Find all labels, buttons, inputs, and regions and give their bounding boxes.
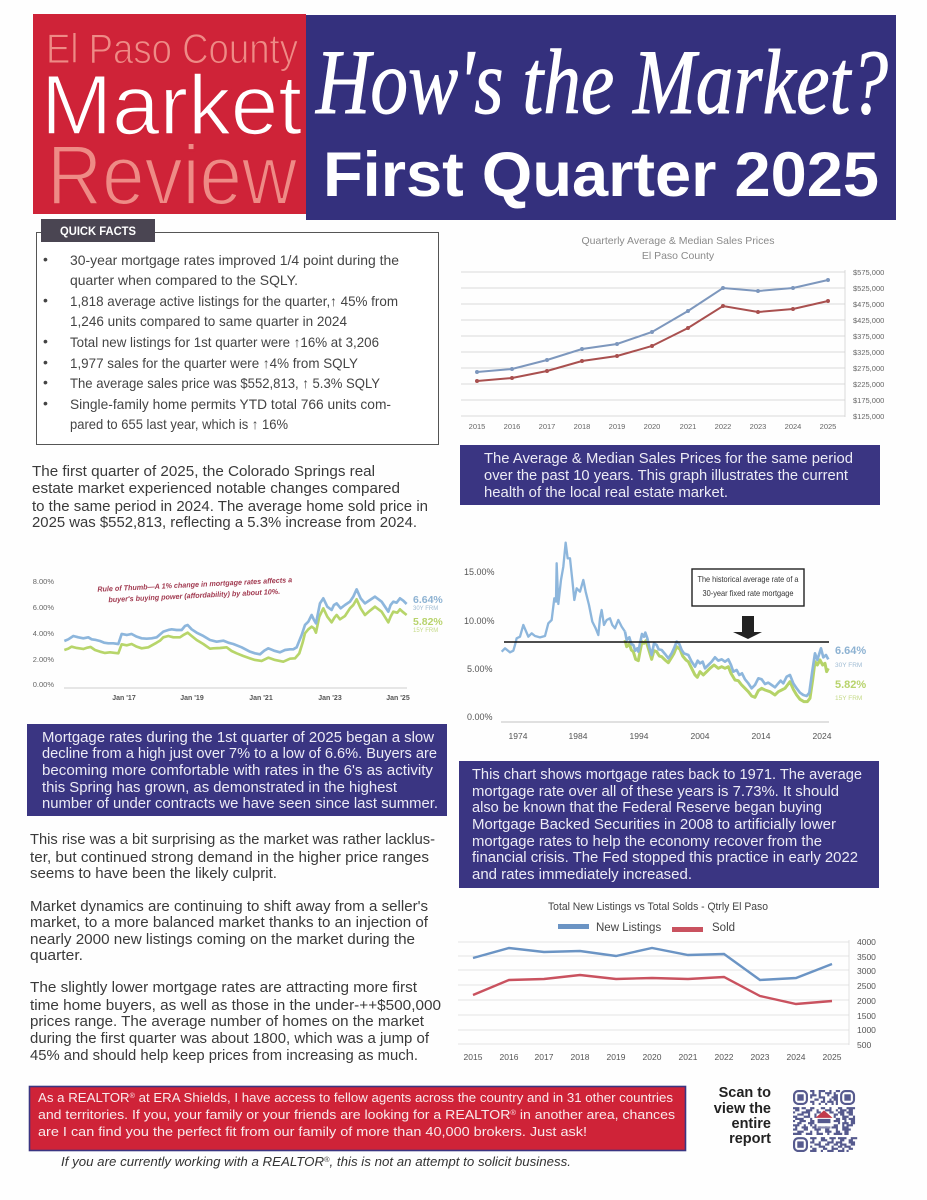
callout: historical mortgage rates: This chart shows mortgage rates back to 1971. The average [472, 767, 862, 783]
scan prompt: entire [732, 1116, 771, 1132]
chart: historical mortgage rates: 0.00% [467, 712, 493, 722]
series: 15-year rate [64, 599, 407, 662]
chart title [582, 235, 774, 262]
callout: historical average: 30-year fixed rate mortgage [702, 589, 794, 598]
scan prompt: report [729, 1131, 771, 1147]
callout: historical mortgage rates [459, 761, 879, 888]
chart: recent mortgage rates: 6.00% [33, 603, 54, 612]
series labels: 30Y FRM [835, 662, 862, 669]
chart: recent mortgage rates: 4.00% [33, 629, 54, 638]
chart title: Total New Listings vs Total Solds - Qtrly El Paso [548, 901, 768, 913]
text block: market commentary: ter, but continued strong demand in the higher price ranges [30, 850, 429, 866]
chart: historical mortgage rates [464, 543, 866, 741]
x axis labels: Jan '23 [318, 695, 342, 702]
x axis labels: 1994 [630, 731, 649, 741]
legend [558, 922, 735, 934]
callout: historical mortgage rates: Mortgage Backed Securities in 2008 to artificially lower [472, 817, 836, 833]
callout: recent mortgage rates: decline from a high just over 7% to a low of 6.6%. Buyers are [42, 746, 437, 762]
text block: intro: to the same period in 2024. The average home sold price in [32, 499, 428, 515]
x axis labels [464, 1052, 842, 1062]
quick facts bullets: • [43, 374, 48, 390]
y axis labels: 2000 [857, 996, 876, 1006]
x axis labels: 2019 [609, 422, 625, 431]
callout: recent mortgage rates: this Spring has grown, as demonstrated in the highest [42, 780, 397, 796]
x axis labels: 2017 [539, 422, 555, 431]
scan prompt: view the [714, 1101, 771, 1117]
quick facts bullets: Single-family home permits YTD total 766 units com- [70, 396, 391, 412]
x axis labels: 2022 [715, 422, 731, 431]
x axis labels: 2021 [680, 422, 696, 431]
callout: sales price explanation: health of the local real estate market. [484, 485, 728, 501]
y axis labels: $125,000 [853, 412, 884, 421]
text block: intro: The first quarter of 2025, the Colorado Springs real [32, 464, 375, 480]
chart: new listings vs solds [458, 901, 876, 1062]
callout: recent mortgage rates: number of under contracts we have seen since last summer. [42, 796, 438, 812]
text block: intro: estate market experienced notable changes compared [32, 481, 400, 497]
callout: recent mortgage rates: becoming more comfortable with rates in the 6's as activity [42, 763, 434, 779]
quick facts bullets: • [43, 251, 48, 267]
y axis labels: 1500 [857, 1011, 876, 1021]
x axis labels [112, 695, 410, 702]
y axis labels: $575,000 [853, 268, 884, 277]
series labels: 15Y FRM [835, 695, 862, 702]
callout: historical average: The historical average rate of a [698, 575, 799, 584]
series: average price [477, 280, 828, 372]
quick facts bullets: • [43, 354, 48, 370]
text block: market commentary: This rise was a bit surprising as the market was rather lacklus- [30, 832, 435, 848]
x axis labels: 2004 [691, 731, 710, 741]
text block: market commentary: time home buyers, as well as those in the under-++$500,000 [30, 998, 441, 1014]
y axis labels: 2500 [857, 981, 876, 991]
quick facts tab [41, 219, 155, 242]
series labels: 5.82% [835, 679, 866, 691]
chart title: Quarterly Average & Median Sales Prices [582, 235, 774, 247]
callout: realtor referral: and territories. If you, your family or your friends are looking for a REALTOR [38, 1107, 474, 1122]
quick facts bullets: Total new listings for 1st quarter were ↑16% at 3,206 [70, 334, 379, 350]
series: sold [473, 975, 832, 1004]
chart: quarterly average and median sales prices [461, 235, 884, 431]
x axis labels: Jan '21 [249, 695, 273, 702]
quick facts bullets: pared to 655 last year, which is ↑ 16% [70, 416, 288, 432]
series labels: 30Y FRM [413, 606, 438, 612]
masthead: El Paso County: El Paso County [46, 25, 298, 72]
x axis labels: 2015 [464, 1052, 483, 1062]
text block: market commentary: nearly 2000 new listings coming on the market during the [30, 932, 415, 948]
x axis labels: 2024 [785, 422, 801, 431]
callout: historical mortgage rates: financial crisis. The Fed stopped this practice in early 2022 [472, 850, 858, 866]
chart: recent mortgage rates: 0.00% [33, 680, 54, 689]
text block: market commentary [30, 832, 441, 1064]
header banner [33, 14, 896, 222]
quick facts tab: QUICK FACTS [60, 226, 136, 238]
annotation: rule of thumb [97, 575, 293, 605]
quick facts bullets: 1,246 units compared to same quarter in 2024 [70, 313, 347, 329]
text block: market commentary: during the first quarter was about 1800, which was a jump of [30, 1031, 430, 1047]
x axis labels: Jan '17 [112, 695, 136, 702]
text block: market commentary: Market dynamics are continuing to shift away from a seller's [30, 899, 428, 915]
y axis labels: $275,000 [853, 364, 884, 373]
icon: house logo [815, 1110, 833, 1129]
y axis labels: $175,000 [853, 396, 884, 405]
icon: QR code [793, 1091, 857, 1151]
callout: recent mortgage rates: Mortgage rates during the 1st quarter of 2025 began a slow [42, 730, 435, 746]
y axis labels: $225,000 [853, 380, 884, 389]
text block: intro: 2025 was $552,813, reflecting a 5.3% increase from 2024. [32, 515, 417, 531]
y axis labels: $425,000 [853, 316, 884, 325]
x axis labels: 2023 [751, 1052, 770, 1062]
series labels: 5.82% [413, 616, 443, 628]
chart: recent mortgage rates: 8.00% [33, 577, 54, 586]
y axis labels: 3500 [857, 952, 876, 962]
callout: realtor referral: As a REALTOR [38, 1090, 128, 1105]
scan prompt [714, 1085, 771, 1147]
quick facts bullets: • [43, 395, 48, 411]
x axis labels: Jan '19 [180, 695, 204, 702]
y axis labels: $525,000 [853, 284, 884, 293]
callout: historical mortgage rates: mortgage rates to help the economy recover from the [472, 834, 822, 850]
chart title: El Paso County [642, 250, 715, 262]
callout: recent mortgage rates [27, 724, 447, 816]
quick facts bullets: • [43, 333, 48, 349]
text block: market commentary: The slightly lower mortgage rates are attracting more first [30, 980, 417, 996]
callout: sales price explanation: The Average & Median Sales Prices for the same period [484, 451, 853, 467]
callout: realtor referral: in another area, chances [516, 1107, 676, 1122]
callout: historical mortgage rates: and rates immediately increased. [472, 867, 692, 883]
legend: New Listings [596, 922, 661, 934]
chart: historical mortgage rates: 5.00% [467, 664, 493, 674]
callout: realtor referral [30, 1086, 686, 1150]
y axis labels [853, 268, 884, 421]
y axis labels: 3000 [857, 966, 876, 976]
x axis labels [469, 422, 836, 431]
y axis labels: 4000 [857, 937, 876, 947]
text block: market commentary: seems to have been the likely culprit. [30, 866, 277, 882]
quick facts bullets: 30-year mortgage rates improved 1/4 point during the [70, 252, 399, 268]
x axis labels: 2025 [820, 422, 836, 431]
disclaimer: If you are currently working with a REALTOR [61, 1155, 309, 1169]
historical average line [504, 641, 829, 643]
disclaimer: , this is not an attempt to solicit business. [330, 1155, 571, 1169]
x axis labels: 2015 [469, 422, 485, 431]
chart: historical mortgage rates: 10.00% [464, 616, 495, 626]
y axis labels: 500 [857, 1040, 871, 1050]
series: 15-year rate [625, 640, 828, 702]
x axis labels: 2025 [823, 1052, 842, 1062]
chart: historical mortgage rates: 15.00% [464, 567, 495, 577]
y axis labels: $375,000 [853, 332, 884, 341]
quick facts bullets: 1,977 sales for the quarter were ↑4% from SQLY [70, 355, 359, 371]
x axis labels: 2016 [500, 1052, 519, 1062]
x axis labels: 2024 [813, 731, 832, 741]
x axis labels [509, 731, 832, 741]
y axis labels: $325,000 [853, 348, 884, 357]
quick facts bullets: quarter when compared to the SQLY. [70, 272, 298, 288]
series labels: 6.64% [835, 645, 866, 657]
x axis labels: 2021 [679, 1052, 698, 1062]
x axis labels: 2017 [535, 1052, 554, 1062]
series labels [835, 645, 866, 702]
quick facts border [36, 232, 438, 444]
title: First Quarter 2025: First Quarter 2025 [323, 140, 879, 210]
masthead: Market: Market [41, 58, 302, 152]
callout: sales price explanation: over the past 10 years. This graph illustrates the current [484, 468, 848, 484]
series: 30-year rate [502, 543, 828, 696]
x axis labels: 2016 [504, 422, 520, 431]
panel: red masthead background [33, 14, 306, 214]
masthead: Review: Review [47, 128, 297, 222]
x axis labels: 2018 [574, 422, 590, 431]
text block: market commentary: 45% and should help keep prices from increasing as much. [30, 1048, 418, 1064]
x axis labels: 2020 [644, 422, 660, 431]
scan prompt: Scan to [719, 1085, 771, 1101]
arrow: down to average line [733, 616, 762, 639]
quick facts bullets: The average sales price was $552,813, ↑ 5.3% SQLY [70, 375, 381, 391]
x axis labels: Jan '25 [386, 695, 410, 702]
text block: intro [32, 464, 428, 531]
callout: realtor referral: at ERA Shields, I have access to fellow agents across the country and in 31 other countries [135, 1090, 674, 1105]
text block: market commentary: prices range. The average number of homes on the market [30, 1014, 424, 1030]
chart: recent mortgage rates: 2.00% [33, 655, 54, 664]
disclaimer: ® [324, 1156, 330, 1164]
series: new listings [473, 948, 832, 980]
text block: market commentary: quarter. [30, 948, 83, 964]
x axis labels: 2019 [607, 1052, 626, 1062]
callout: historical mortgage rates: mortgage rate over all of these years is 7.73%. It should [472, 784, 839, 800]
callout: historical mortgage rates: also be known that the Federal Reserve began buying [472, 800, 822, 816]
callout: sales price explanation [460, 445, 880, 505]
x axis labels: 2022 [715, 1052, 734, 1062]
x axis labels: 1974 [509, 731, 528, 741]
y axis labels: 1000 [857, 1025, 876, 1035]
x axis labels: 2014 [752, 731, 771, 741]
panel: quick facts [36, 219, 438, 444]
callout: realtor referral: are I can find you the perfect fit from our family of more than 40,000 brokers. Just ask! [38, 1124, 587, 1139]
panel: blue title background [306, 15, 896, 220]
x axis labels: 1984 [569, 731, 588, 741]
text block: market commentary: market, to a more balanced market thanks to an injection of [30, 915, 429, 931]
x axis labels: 2024 [787, 1052, 806, 1062]
y axis labels: $475,000 [853, 300, 884, 309]
chart: recent mortgage rates [33, 575, 443, 702]
series: 30-year rate [64, 589, 407, 654]
x axis labels: 2023 [750, 422, 766, 431]
x axis labels: 2018 [571, 1052, 590, 1062]
annotation: rule of thumb: Rule of Thumb—A 1% change in mortgage rates affects a [97, 575, 292, 594]
quick facts bullets: • [43, 292, 48, 308]
quick facts bullets [43, 251, 399, 432]
series labels: 6.64% [413, 594, 443, 606]
callout: historical average [692, 569, 804, 606]
callout: realtor referral: ® [510, 1109, 517, 1117]
annotation: rule of thumb: buyer's buying power (affordability) by about 10%. [108, 587, 280, 604]
y axis labels [857, 937, 876, 1050]
series: median price [477, 301, 828, 381]
series labels [413, 594, 443, 634]
quick facts bullets: 1,818 average active listings for the quarter,↑ 45% from [70, 293, 398, 309]
series labels: 15Y FRM [413, 628, 438, 634]
legend: Sold [712, 922, 735, 934]
callout: realtor referral: ® [130, 1092, 136, 1100]
x axis labels: 2020 [643, 1052, 662, 1062]
